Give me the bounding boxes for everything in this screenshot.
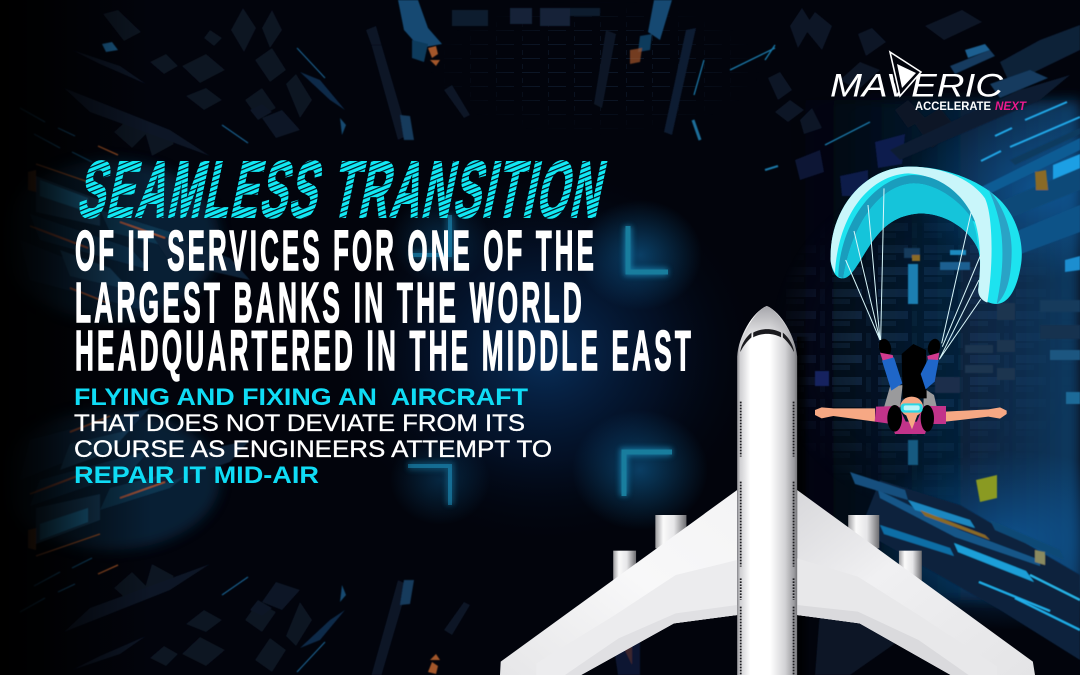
headline: white lines	[75, 219, 694, 383]
logo: Maveric: ACCELERATE	[915, 101, 991, 113]
skydiver body	[815, 337, 1007, 434]
subheading text block: COURSE AS ENGINEERS ATTEMPT TO	[74, 436, 552, 463]
canopy	[831, 167, 1022, 304]
left wing	[500, 490, 737, 675]
icon: parachutist	[815, 167, 1022, 434]
subheading text block: THAT DOES NOT DEVIATE FROM ITS	[74, 410, 525, 437]
suspension lines	[846, 188, 981, 359]
glowing chevron arrows	[390, 195, 708, 530]
icon: airplane	[500, 306, 1035, 675]
subheading text block	[74, 384, 552, 489]
fuselage body	[737, 306, 797, 675]
cockpit windows	[740, 329, 794, 352]
subheading text block: REPAIR IT MID-AIR	[74, 462, 319, 489]
top edge tiles	[102, 0, 696, 135]
right wing	[797, 490, 1035, 675]
subheading text block: FLYING AND FIXING AN AIRCRAFT	[74, 384, 528, 411]
fuselage shadow	[797, 337, 809, 675]
logo: Maveric: NEXT	[995, 101, 1027, 113]
lower-right streaks	[612, 300, 1080, 675]
logo: Maveric	[830, 52, 1027, 113]
engines	[613, 515, 922, 581]
logo: Maveric: MAVERIC	[830, 68, 1004, 104]
window rows	[741, 402, 794, 675]
